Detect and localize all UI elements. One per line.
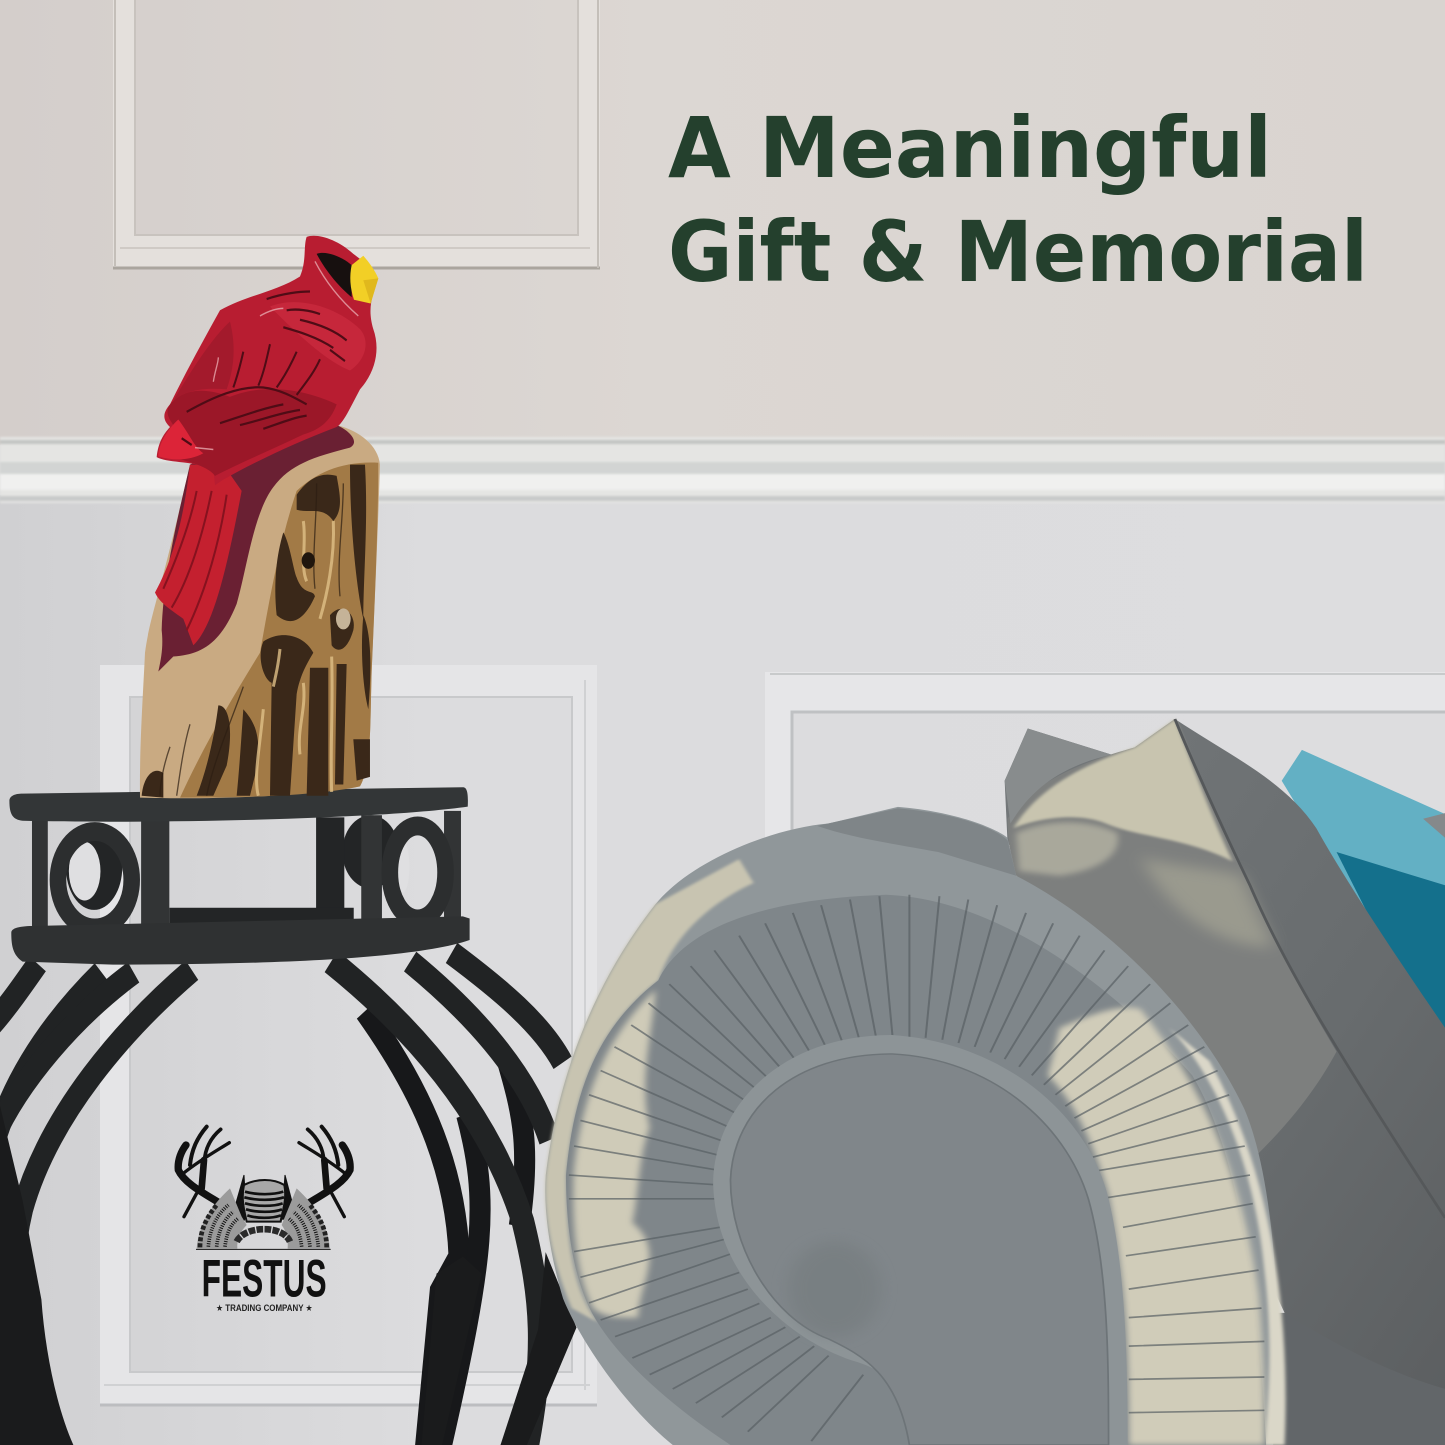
cardinal beak — [350, 256, 378, 304]
cardinal mask — [317, 253, 352, 297]
logo wordmark: FESTUS — [202, 1250, 327, 1309]
lower left wall panel moulding — [100, 665, 597, 1405]
sunlit rim right — [1169, 1028, 1286, 1445]
carved cardinal on wood stump — [140, 236, 380, 798]
stand rings — [58, 826, 446, 928]
body shading — [160, 389, 337, 476]
iron plant stand — [0, 787, 576, 1445]
teal pillow — [1282, 750, 1445, 1033]
cardinal tail — [155, 465, 242, 645]
sunlit pleats right — [1048, 1008, 1264, 1445]
lower right wall panel moulding — [765, 672, 1445, 840]
grey back pillow — [1005, 719, 1445, 1389]
sofa top roll shadow — [817, 808, 1016, 876]
upper wall panel moulding — [113, 0, 600, 268]
bark core — [180, 463, 378, 798]
title: A Meaningful — [668, 99, 1272, 197]
stand posts — [32, 811, 461, 942]
stand ring openings — [69, 842, 100, 900]
stump knots — [302, 552, 315, 569]
pillow front face — [1008, 719, 1337, 1156]
sofa seat — [1273, 1313, 1445, 1445]
feather carvings — [182, 291, 347, 445]
arm medallion piping — [713, 1035, 1128, 1445]
logo tagline: ★ TRADING COMPANY ★ — [216, 1303, 313, 1313]
stand top plate — [9, 787, 468, 822]
wood stump — [140, 425, 380, 798]
pillow seam — [1175, 719, 1445, 1218]
title — [668, 99, 1368, 301]
stand lower leg masses — [0, 1106, 576, 1445]
dark bark patches — [142, 465, 370, 798]
logo left antler — [178, 1127, 247, 1220]
cardinal body — [157, 236, 377, 485]
pillow sunlit cream patch — [1013, 719, 1233, 862]
Festus Trading Company logo — [178, 1127, 350, 1313]
title: Gift & Memorial — [668, 203, 1368, 301]
purple heartwood band — [158, 425, 354, 672]
light grain — [257, 521, 334, 796]
sofa arm outer shell — [545, 807, 1277, 1445]
stand lower band — [11, 916, 470, 965]
pillow top corner — [1005, 729, 1111, 824]
sofa — [545, 719, 1445, 1445]
stand back rings and posts — [66, 815, 399, 930]
medallion soft shadow — [788, 1242, 881, 1337]
logo turkey fan — [196, 1180, 331, 1249]
stand legs — [0, 953, 563, 1445]
sunlit pleats left — [573, 990, 655, 1318]
sunlit rim left — [545, 859, 754, 1322]
pleated panel — [566, 895, 1266, 1445]
arm medallion — [730, 1054, 1109, 1445]
dado rail — [0, 437, 1445, 503]
pleat lines — [569, 895, 1264, 1441]
logo right antler — [282, 1127, 350, 1220]
